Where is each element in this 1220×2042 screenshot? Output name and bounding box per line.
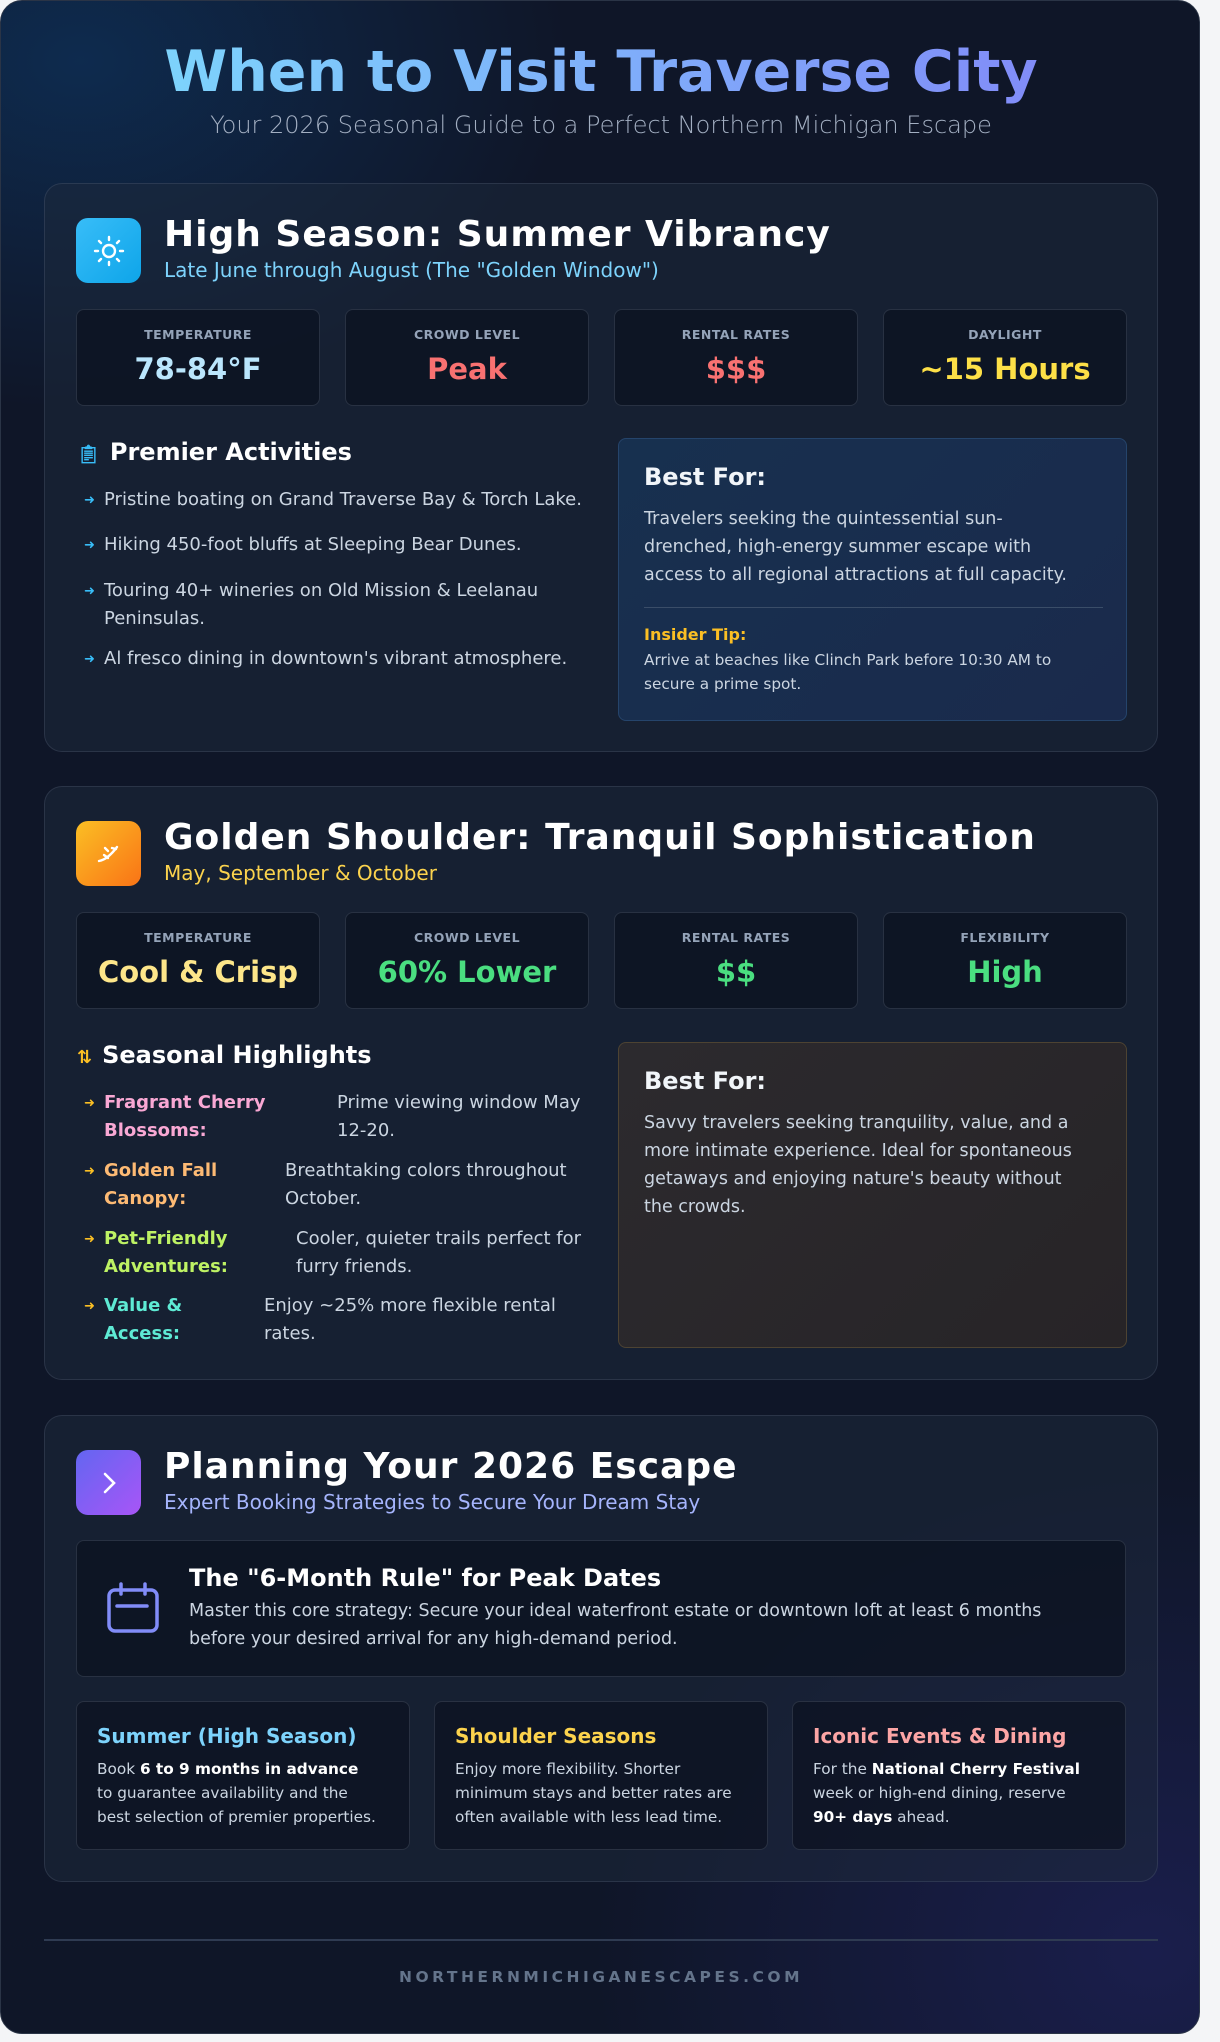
subheading: Expert Booking Strategies to Secure Your Dream Stay: [164, 1490, 700, 1514]
heading: High Season: Summer Vibrancy: [164, 214, 831, 255]
stat: crowd: Peak: [427, 352, 507, 386]
card: events: Iconic Events & Dining: [813, 1724, 1066, 1748]
activities list: Al fresco dining in downtown's vibrant atmosphere.: [104, 648, 567, 669]
stat: flexibility: FLEXIBILITY: [960, 930, 1050, 945]
6-month rule box: The "6-Month Rule" for Peak Dates: [189, 1564, 661, 1592]
stat: temperature: 78-84°F: [134, 352, 262, 386]
highlights list: Canopy:: [104, 1188, 186, 1209]
icon: leaf: [76, 821, 141, 886]
highlights list: Pet-Friendly: [104, 1228, 227, 1249]
highlights list: Adventures:: [104, 1256, 228, 1277]
highlights list: Enjoy ~25% more flexible rental: [264, 1295, 556, 1316]
panel: high season: [44, 183, 1158, 752]
activities list: ➜: [84, 493, 95, 508]
stat: temperature: TEMPERATURE: [144, 930, 252, 945]
activities list: Hiking 450-foot bluffs at Sleeping Bear Dunes.: [104, 534, 522, 555]
stat: rates: RENTAL RATES: [682, 327, 790, 342]
activities list: ➜: [84, 538, 95, 553]
activities list: Touring 40+ wineries on Old Mission & Leelanau Peninsulas.: [104, 580, 538, 629]
card: summer: Book 6 to 9 months in advance: [97, 1760, 358, 1778]
highlights list: ➜: [84, 1299, 95, 1314]
stat: daylight: DAYLIGHT: [968, 327, 1042, 342]
highlights list: ➜: [84, 1164, 95, 1179]
stat: crowd: [345, 309, 589, 406]
stat: crowd: CROWD LEVEL: [414, 930, 520, 945]
stat: rates: $$: [716, 955, 756, 989]
subtitle: Your 2026 Seasonal Guide to a Perfect Northern Michigan Escape: [210, 111, 992, 139]
highlights heading: ⇅ Seasonal Highlights: [77, 1041, 372, 1069]
highlights list: October.: [285, 1188, 361, 1209]
best for box: Best For:: [644, 1067, 766, 1095]
stat: flexibility: High: [967, 955, 1043, 989]
highlights list: Prime viewing window May: [337, 1092, 581, 1113]
highlights list: Cooler, quieter trails perfect for: [296, 1228, 581, 1249]
icon: calendar: [107, 1582, 159, 1633]
stat: daylight: ~15 Hours: [919, 352, 1091, 386]
activities list: [84, 489, 582, 669]
stat: temperature: Cool & Crisp: [98, 955, 298, 989]
stat: temperature: [76, 309, 320, 406]
highlights list: ➜: [84, 1096, 95, 1111]
best for box: Arrive at beaches like Clinch Park before 10:30 AM to secure a prime spot.: [644, 651, 1051, 693]
6-month rule box: [76, 1540, 1126, 1677]
stat: rates: $$$: [706, 352, 766, 386]
stat: temperature: [76, 912, 320, 1009]
card: shoulder: [434, 1701, 768, 1850]
card: events: For the National Cherry Festival week or high-end dining, reserve 90+ days ahead.: [813, 1760, 1080, 1826]
stat: temperature: TEMPERATURE: [144, 327, 252, 342]
stat: daylight: [883, 309, 1127, 406]
panel: planning: [44, 1415, 1158, 1882]
best for box: Insider Tip:: [644, 625, 746, 644]
best for box: Travelers seeking the quintessential sun-drenched, high-energy summer escape with access to all regional attractions at full capacity.: [644, 509, 1067, 585]
highlights list: 12-20.: [337, 1120, 395, 1141]
highlights list: [84, 1092, 581, 1344]
stat: flexibility: [883, 912, 1127, 1009]
icon: sun: [76, 218, 141, 283]
card: events: [792, 1701, 1126, 1850]
card: summer: to guarantee availability and the best selection of premier properties.: [97, 1784, 376, 1826]
panel: golden shoulder: [44, 786, 1158, 1380]
best for box: [618, 1042, 1127, 1348]
card: summer: [76, 1701, 410, 1850]
stat: crowd: [345, 912, 589, 1009]
activities list: ➜: [84, 652, 95, 667]
highlights list: Blossoms:: [104, 1120, 207, 1141]
title: When to Visit Traverse City: [164, 39, 1038, 105]
card: summer: Summer (High Season): [97, 1724, 356, 1748]
card: shoulder: Enjoy more flexibility. Shorter minimum stays and better rates are often available with less lead time.: [455, 1760, 732, 1826]
subheading: May, September & October: [164, 861, 437, 885]
stat: crowd: 60% Lower: [378, 955, 556, 989]
subheading: Late June through August (The "Golden Window"): [164, 258, 659, 282]
stat: rates: [614, 309, 858, 406]
highlights list: Breathtaking colors throughout: [285, 1160, 567, 1181]
6-month rule box: Master this core strategy: Secure your ideal waterfront estate or downtown loft at least 6 months before your desired arrival for any high-demand period.: [189, 1601, 1041, 1649]
highlights list: Access:: [104, 1323, 180, 1344]
highlights list: ➜: [84, 1232, 95, 1247]
activities heading: 📋︎ Premier Activities: [77, 438, 352, 466]
highlights list: Fragrant Cherry: [104, 1092, 265, 1113]
stat: rates: [614, 912, 858, 1009]
heading: Planning Your 2026 Escape: [164, 1446, 738, 1487]
card: shoulder: Shoulder Seasons: [455, 1724, 656, 1748]
footer: NORTHERNMICHIGANESCAPES.COM: [399, 1968, 803, 1986]
activities list: ➜: [84, 584, 95, 599]
heading: Golden Shoulder: Tranquil Sophistication: [164, 817, 1036, 858]
activities list: Pristine boating on Grand Traverse Bay & Torch Lake.: [104, 489, 582, 510]
highlights list: Golden Fall: [104, 1160, 217, 1181]
icon: chevron: [76, 1450, 141, 1515]
best for box: Best For:: [644, 463, 766, 491]
best for box: [618, 438, 1127, 721]
best for box: Savvy travelers seeking tranquility, value, and a more intimate experience. Ideal for spontaneous getaways and enjoying nature's beauty without the crowds.: [644, 1113, 1072, 1217]
stat: rates: RENTAL RATES: [682, 930, 790, 945]
highlights list: furry friends.: [296, 1256, 412, 1277]
highlights list: rates.: [264, 1323, 316, 1344]
stat: crowd: CROWD LEVEL: [414, 327, 520, 342]
highlights list: Value &: [104, 1295, 182, 1316]
